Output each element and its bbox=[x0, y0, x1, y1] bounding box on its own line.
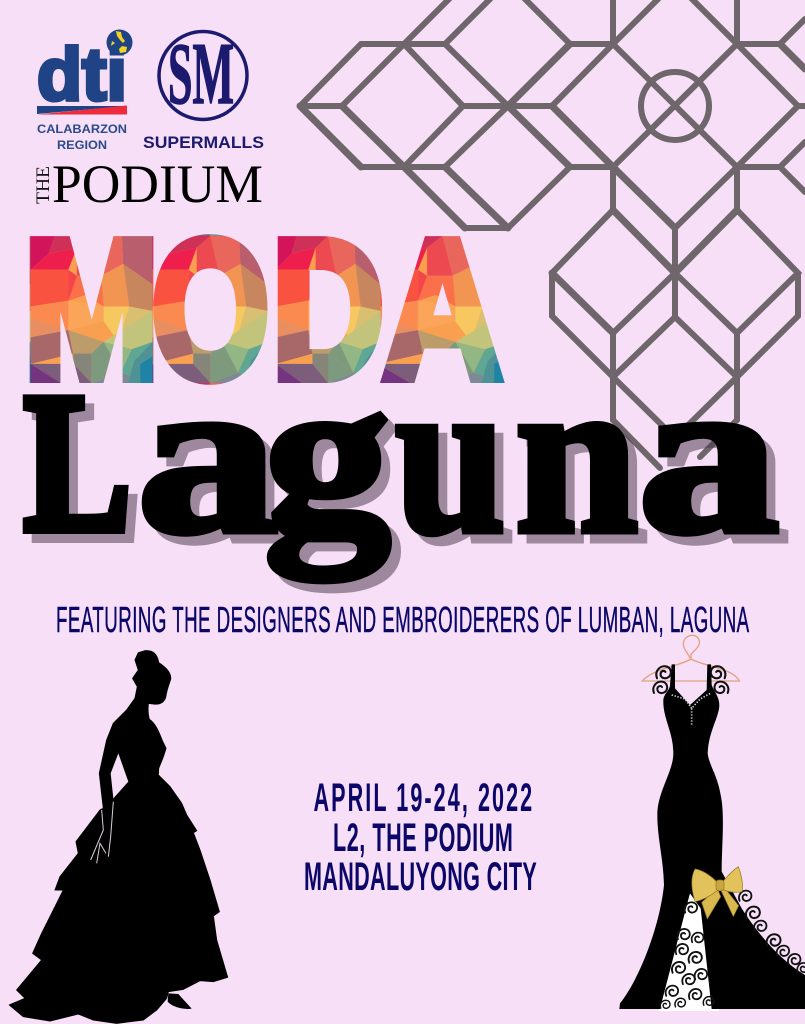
title: MODA: D bbox=[272, 201, 384, 419]
icon: woman silhouette in gown bbox=[9, 651, 228, 1023]
scroll embroidery bbox=[653, 666, 805, 1008]
logo: The Podium: THE bbox=[33, 166, 54, 204]
event details: APRIL 19-24, 2022 bbox=[314, 775, 532, 820]
geometric line pattern bbox=[300, 0, 805, 468]
logo: DTI Calabarzon Region: CALABARZON bbox=[37, 122, 127, 136]
logo: SM Supermalls: SUPERMALLS bbox=[143, 134, 264, 152]
title: MODA bbox=[24, 200, 502, 420]
title: MODA: O bbox=[152, 201, 269, 420]
title: Laguna: g bbox=[264, 329, 391, 581]
logo: SM Supermalls bbox=[143, 26, 264, 152]
title: Laguna bbox=[24, 329, 779, 581]
icon: black gown on hanger bbox=[619, 635, 805, 1011]
gold bow bbox=[692, 867, 742, 919]
title: Laguna: a bbox=[137, 330, 278, 580]
title: Laguna: a bbox=[638, 330, 779, 580]
logo: DTI Calabarzon Region: REGION bbox=[57, 138, 107, 152]
logo: DTI Calabarzon Region bbox=[37, 30, 132, 152]
event details: MANDALUYONG CITY bbox=[304, 854, 537, 899]
necklace bbox=[672, 693, 711, 725]
event details bbox=[304, 775, 537, 899]
logo: SM Supermalls: SM bbox=[168, 26, 234, 123]
gown bbox=[619, 664, 805, 1009]
title: MODA: M bbox=[24, 201, 159, 419]
logo: DTI Calabarzon Region: dti bbox=[37, 33, 127, 116]
event details: L2, THE PODIUM bbox=[333, 815, 513, 860]
title: Laguna: u bbox=[395, 330, 506, 581]
title: Laguna: L bbox=[24, 352, 131, 572]
title: Laguna: n bbox=[515, 331, 638, 580]
title: MODA: A bbox=[383, 200, 502, 419]
hanger bbox=[642, 635, 739, 681]
lace panel bbox=[658, 892, 719, 1011]
subtitle: FEATURING THE DESIGNERS AND EMBROIDERERS OF LUMBAN, LAGUNA bbox=[56, 601, 750, 641]
logo: The Podium: PODIUM bbox=[52, 154, 263, 214]
